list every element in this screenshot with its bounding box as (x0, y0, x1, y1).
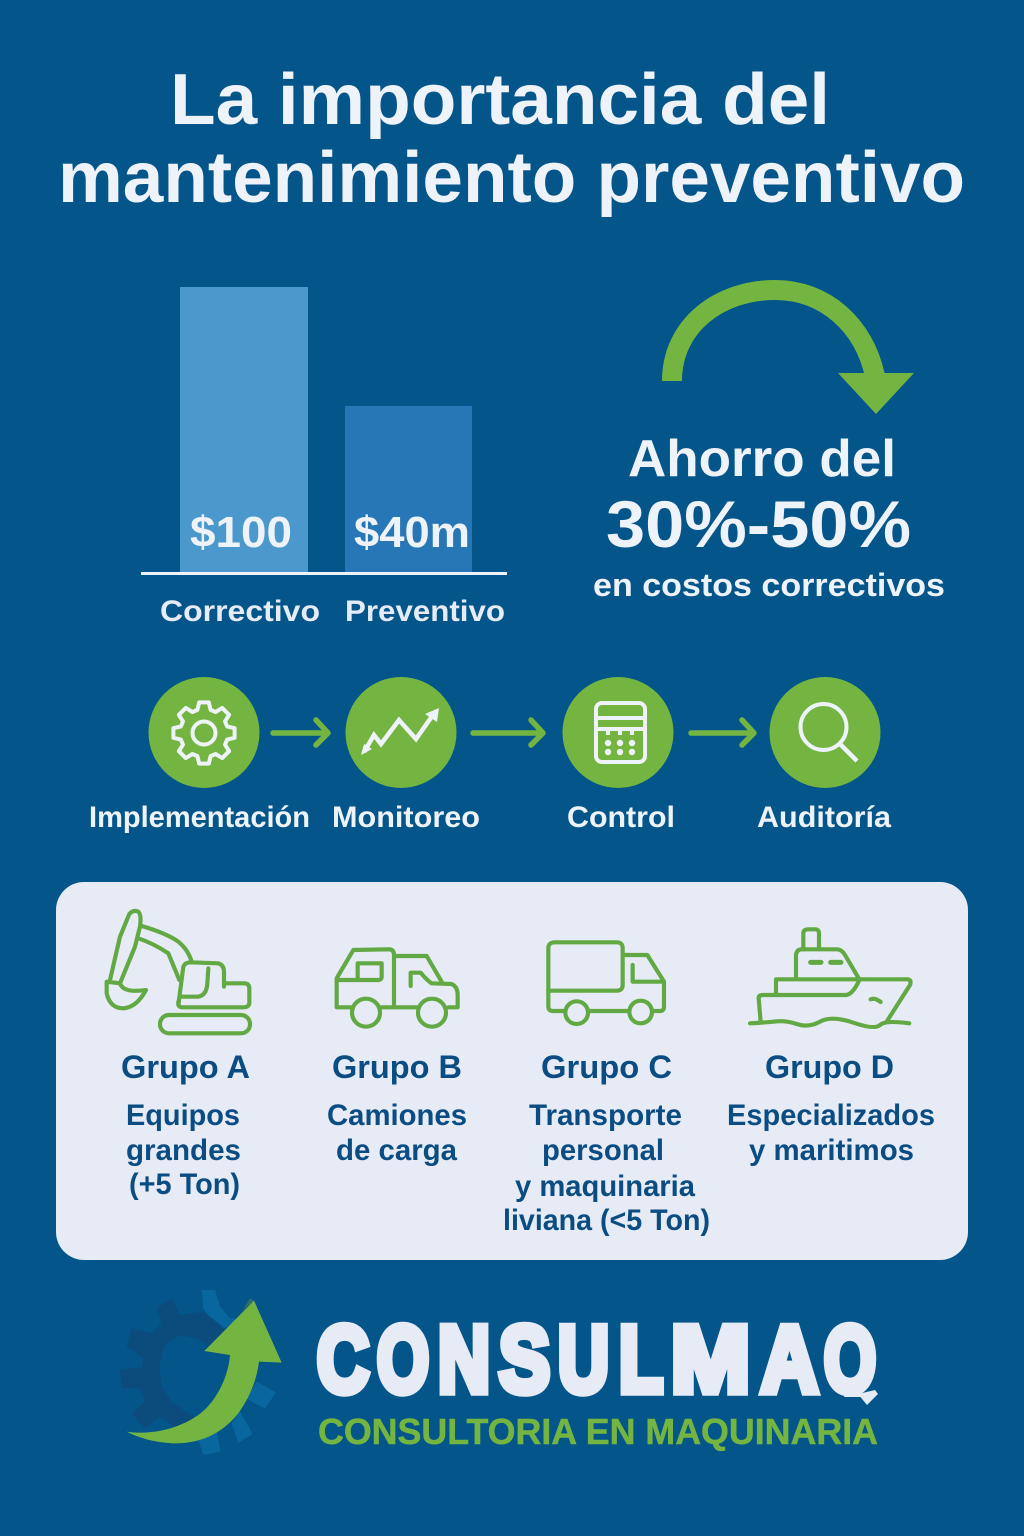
icon: curved savings arrow (672, 290, 914, 414)
step: Monitoreo (332, 677, 480, 834)
group C (503, 942, 710, 1237)
step: Control (562, 677, 675, 834)
callout: savings: 30%-50% (606, 487, 911, 561)
process flow (89, 677, 891, 834)
group C: Grupo C (541, 1049, 672, 1085)
callout: savings (593, 430, 945, 603)
callout: savings: en costos correctivos (593, 567, 945, 603)
step: Auditoría (757, 677, 891, 834)
logo: wordmark: U (558, 1306, 609, 1412)
logo: wordmark: Q (824, 1306, 876, 1412)
logo: wordmark: N (438, 1306, 490, 1412)
bar chart: costs: $40m (354, 508, 470, 557)
group A: Equipos (126, 1099, 240, 1132)
group D: y maritimos (749, 1134, 914, 1167)
group C: Transporte (529, 1099, 682, 1132)
logo: wordmark: A (761, 1306, 818, 1412)
logo: wordmark (316, 1322, 878, 1405)
group B: de carga (336, 1134, 457, 1167)
group D (727, 929, 935, 1167)
title: La importancia del (170, 60, 830, 140)
group A: grandes (126, 1134, 241, 1167)
group D: Especializados (727, 1099, 935, 1132)
group B: Camiones (327, 1099, 467, 1132)
title (58, 60, 965, 218)
step: Auditoría: Auditoría (757, 801, 891, 834)
logo: wordmark: O (377, 1306, 429, 1412)
group A: Grupo A (121, 1049, 250, 1085)
group A (107, 911, 250, 1201)
step: Implementación (89, 677, 310, 834)
group D: Grupo D (765, 1049, 894, 1085)
group A: (+5 Ton) (129, 1168, 240, 1201)
panel: equipment groups (56, 882, 968, 1260)
group C: y maquinaria (515, 1170, 695, 1203)
logo: wordmark: C (317, 1306, 369, 1412)
group B: Grupo B (332, 1049, 462, 1085)
logo: wordmark: L (619, 1306, 663, 1412)
group C: liviana (<5 Ton) (503, 1204, 710, 1237)
arrow (273, 720, 328, 745)
logo: wordmark: M (671, 1306, 750, 1412)
callout: savings: Ahorro del (628, 430, 896, 488)
bar chart: costs (141, 287, 507, 628)
step: Implementación: Implementación (89, 801, 310, 834)
step: Monitoreo: Monitoreo (332, 801, 480, 834)
bar chart: costs: $100 (190, 508, 292, 557)
bar chart: costs: Preventivo (345, 595, 505, 628)
arrow (691, 720, 754, 745)
logo: wordmark: S (499, 1306, 550, 1412)
step: Control: Control (567, 801, 675, 834)
bar chart: costs: Correctivo (160, 595, 320, 628)
arrow (473, 720, 543, 745)
group B (327, 949, 467, 1167)
logo: tagline: CONSULTORIA EN MAQUINARIA (318, 1411, 878, 1452)
title: mantenimiento preventivo (58, 138, 965, 218)
group C: personal (542, 1134, 664, 1167)
logo: gear and arrow (120, 1290, 282, 1455)
